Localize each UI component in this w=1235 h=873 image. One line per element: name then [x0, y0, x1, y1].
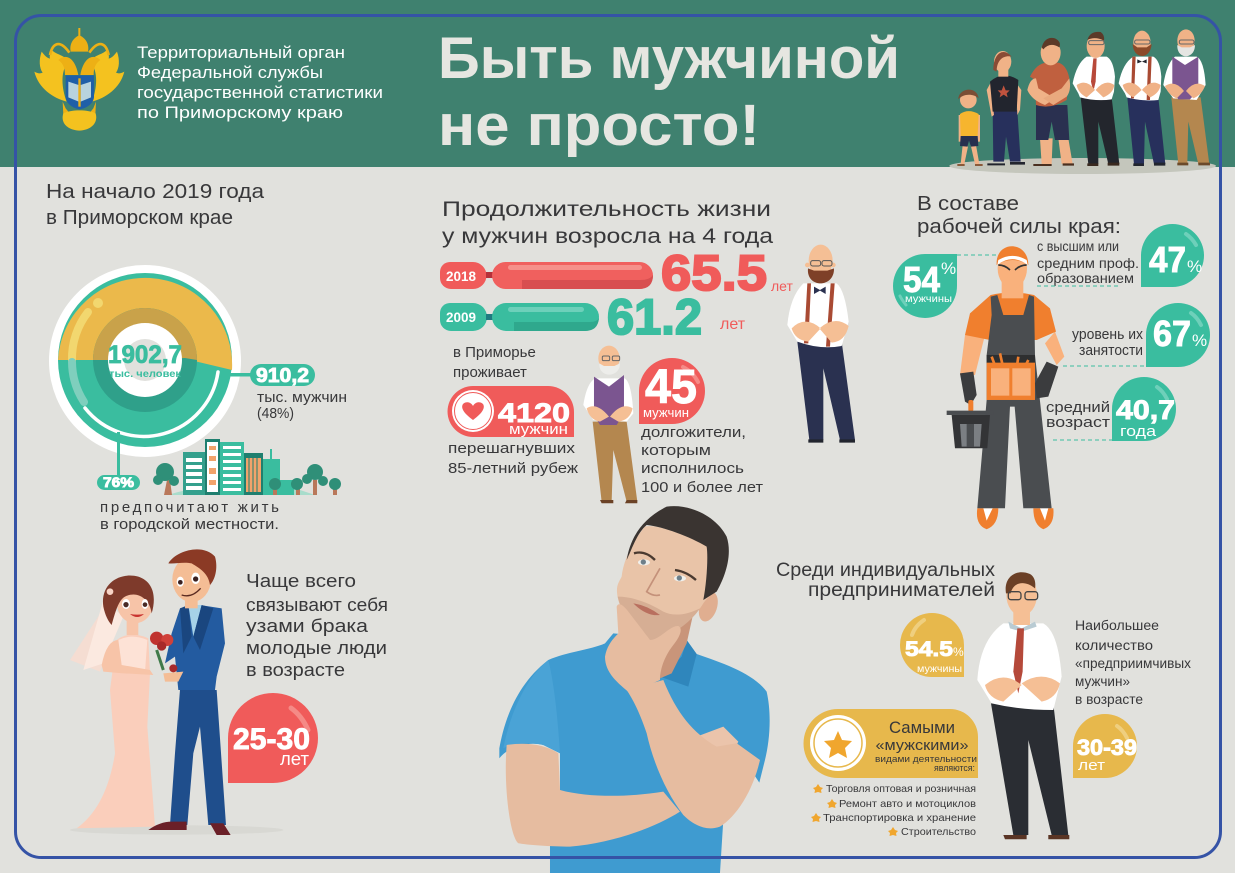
heading: workforce: рабочей силы края: — [917, 216, 1121, 238]
heading: life expectancy — [442, 198, 773, 248]
illustration: bearded man with bow tie — [787, 245, 855, 443]
man in red t-shirt — [1027, 38, 1074, 166]
stat: 47 percent education: 47 — [1149, 239, 1186, 280]
boy — [957, 90, 983, 166]
photo illustration: thoughtful man — [499, 506, 770, 873]
organisation name — [137, 43, 383, 122]
badge: most male activities: видами деятельности — [875, 754, 977, 765]
bar: 2009 life expectancy: 2009 — [446, 309, 476, 325]
badge: 30-39 years — [1073, 714, 1137, 778]
callout: men count: 910,2 — [256, 365, 309, 387]
text: over 85 — [448, 440, 578, 477]
illustration: city skyline — [153, 439, 341, 495]
list: activities: Транспортировка и хранение — [823, 812, 976, 824]
badge: 45 centenarians: мужчин — [643, 405, 689, 420]
illustration: men of different ages — [949, 29, 1216, 174]
heading: life expectancy: у мужчин возросла на 4 года — [442, 225, 773, 248]
text: marriage — [246, 571, 388, 680]
badge: 4120 men: 4120 — [498, 398, 570, 428]
bar: 2009 life expectancy — [440, 289, 746, 345]
title — [438, 26, 900, 158]
bouquet — [150, 632, 177, 672]
bar: 2018 life expectancy: лет — [771, 278, 793, 294]
header band — [0, 0, 1235, 167]
forearm and upper arm — [627, 680, 760, 828]
badge: marriage age: лет — [280, 749, 309, 769]
title: не просто! — [438, 93, 760, 158]
callout: men count — [230, 364, 347, 422]
stat: 54.5 percent men: 54.5 — [905, 638, 953, 661]
list: activities — [811, 783, 976, 838]
text: centenarians: 100 и более лет — [641, 479, 763, 496]
text: entrepreneur age: «предприимчивых — [1075, 656, 1191, 671]
facial features — [634, 552, 696, 580]
text: residents: проживает — [453, 364, 527, 381]
stat: 47 percent education — [1037, 224, 1204, 287]
bar: 2018 life expectancy — [440, 245, 793, 301]
groom — [148, 549, 231, 835]
badge: most male activities: Самыми — [889, 718, 955, 737]
badge: 45 centenarians — [639, 358, 705, 424]
heading: entrepreneurs — [776, 560, 996, 601]
badge: 4120 men — [448, 386, 574, 438]
stat: 54 percent men: 54 — [903, 259, 940, 300]
chart: population donut: 1902,7 — [108, 341, 182, 369]
badge: marriage age: 25-30 — [233, 723, 310, 756]
text: entrepreneur age: количество — [1075, 638, 1153, 653]
text: over 85: перешагнувших — [448, 440, 576, 457]
stat: 67 percent employment — [1063, 303, 1210, 367]
neck and head — [650, 613, 693, 678]
illustration: entrepreneur — [977, 572, 1069, 839]
stat: 47 percent education: образованием — [1037, 270, 1134, 286]
stat: 67 percent employment: % — [1192, 331, 1207, 350]
heading: entrepreneurs: Среди индивидуальных — [776, 560, 996, 581]
heading: life expectancy: Продолжительность жизни — [442, 198, 771, 221]
bar: 2018 life expectancy: 65.5 — [661, 245, 767, 301]
callout: urban share: в городской местности. — [100, 516, 279, 533]
heading: population — [46, 181, 265, 229]
stat: 47 percent education: средним проф. — [1037, 255, 1139, 271]
text: centenarians: исполнилось — [641, 460, 744, 477]
text: residents — [453, 344, 536, 381]
text: entrepreneur age: мужчин» — [1075, 674, 1130, 689]
teenager — [987, 51, 1025, 165]
man with tie — [1073, 32, 1119, 166]
heading: population: На начало 2019 года — [46, 181, 265, 203]
illustration: bride and groom — [70, 549, 283, 835]
stat: 67 percent employment: 67 — [1153, 313, 1191, 354]
text: entrepreneur age: в возрасте — [1075, 692, 1143, 707]
list: activities: Ремонт авто и мотоциклов — [839, 798, 976, 810]
text: centenarians: которым — [641, 442, 711, 459]
callout: men count: (48%) — [257, 405, 294, 422]
crossed arm left — [506, 744, 680, 847]
badge: 45 centenarians: 45 — [645, 361, 697, 414]
text: marriage: Чаще всего — [246, 571, 356, 591]
text: residents: в Приморье — [453, 344, 536, 361]
text: marriage: узами брака — [246, 616, 369, 636]
badge: 30-39 years: лет — [1078, 757, 1105, 774]
stat: average age: 40,7 — [1116, 395, 1175, 425]
list: activities: Строительство — [901, 826, 976, 838]
organisation name: государственной статистики — [137, 83, 383, 102]
heading: workforce — [917, 193, 1121, 238]
organisation name: Территориальный орган — [137, 43, 345, 62]
callout: men count: тыс. мужчин — [257, 389, 347, 406]
heading: entrepreneurs: предпринимателей — [808, 580, 995, 601]
hand at chin — [605, 604, 681, 693]
stat: average age — [1046, 377, 1176, 441]
text: entrepreneur age — [1075, 618, 1191, 707]
text: marriage: в возрасте — [246, 660, 345, 680]
bar: 2009 life expectancy: 61.2 — [607, 289, 702, 345]
shirt — [499, 633, 770, 873]
callout: urban share: предпочитают жить — [100, 499, 279, 516]
stat: average age: года — [1120, 423, 1157, 440]
list: activities: Торговля оптовая и розничная — [826, 783, 976, 795]
badge: marriage age — [228, 693, 318, 783]
illustration: worker — [947, 246, 1064, 529]
chart: population donut: тыс. человек — [109, 369, 182, 380]
stat: 54 percent men: % — [941, 259, 956, 278]
bar: 2018 life expectancy: 2018 — [446, 268, 476, 284]
text: centenarians — [641, 424, 763, 496]
badge: 30-39 years: 30-39 — [1077, 735, 1137, 760]
text: centenarians: долгожители, — [641, 424, 746, 441]
bearded man — [1119, 31, 1165, 166]
text: over 85: 85-летний рубеж — [448, 460, 578, 477]
stat: average age: средний — [1046, 399, 1110, 416]
title: Быть мужчиной — [438, 26, 900, 91]
stat: 67 percent employment: уровень их — [1072, 326, 1143, 343]
organisation name: Федеральной службы — [137, 63, 323, 82]
fingers — [697, 727, 738, 758]
bar: 2009 life expectancy: лет — [720, 316, 746, 333]
stat: 54 percent men — [893, 254, 998, 318]
callout: urban share: 76% — [103, 474, 135, 490]
stat: 54.5 percent men: % — [953, 645, 964, 659]
stat: 47 percent education: % — [1187, 257, 1202, 276]
organisation name: по Приморскому краю — [137, 103, 343, 122]
heading: workforce: В составе — [917, 193, 1019, 215]
stat: 54.5 percent men — [900, 613, 964, 677]
callout: urban share — [97, 432, 279, 533]
stat: average age: возраст — [1046, 414, 1110, 431]
old man — [1163, 29, 1210, 165]
stat: 54 percent men: мужчины — [905, 293, 952, 305]
stat: 67 percent employment: занятости — [1079, 342, 1143, 359]
icon: state emblem — [34, 28, 124, 131]
illustration: elderly man — [583, 346, 637, 503]
stat: 54.5 percent men: мужчины — [917, 664, 962, 675]
badge: most male activities: «мужскими» — [876, 737, 968, 754]
stat: 47 percent education: с высшим или — [1037, 238, 1119, 254]
text: entrepreneur age: Наибольшее — [1075, 618, 1159, 633]
badge: most male activities: являются: — [934, 763, 975, 774]
text: marriage: молодые люди — [246, 638, 387, 658]
chart: population donut — [49, 265, 241, 457]
heading: population: в Приморском крае — [46, 207, 233, 229]
badge: most male activities — [804, 709, 978, 778]
bride — [70, 576, 155, 828]
badge: 4120 men: мужчин — [509, 421, 568, 438]
text: marriage: связывают себя — [246, 595, 388, 615]
